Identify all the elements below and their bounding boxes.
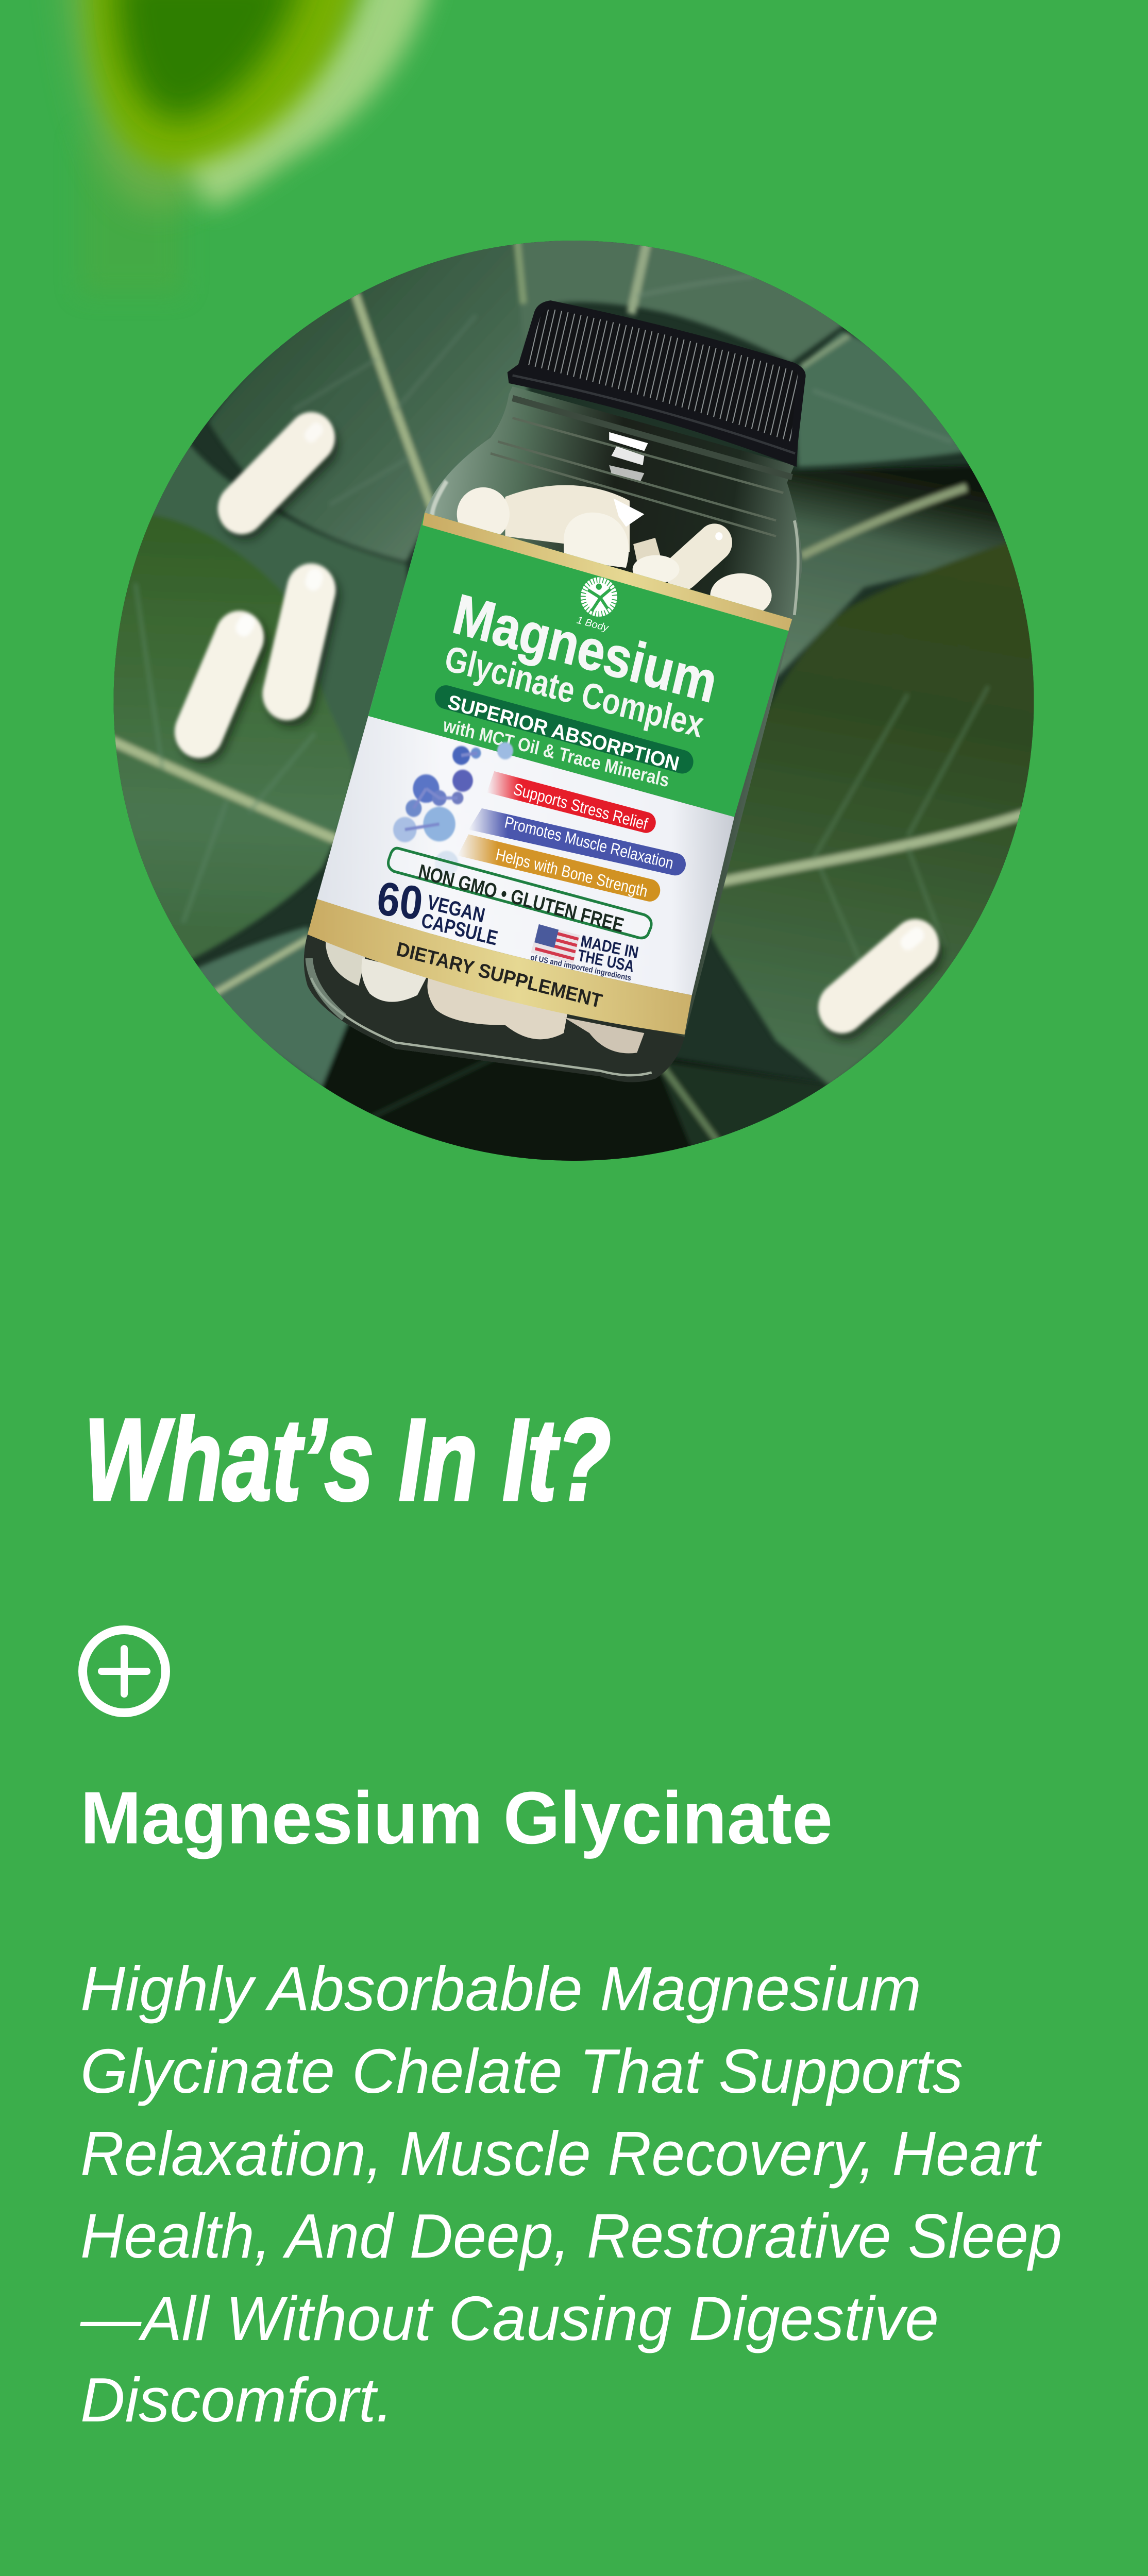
capsules inside jar, bottom	[326, 938, 644, 1053]
capsule count: CAPSULE	[419, 909, 500, 950]
dietary supplement: DIETARY SUPPLEMENT	[394, 938, 604, 1012]
leaf top centre	[518, 241, 843, 363]
made in usa badge: of US and imported ingredients	[530, 954, 632, 983]
mct line: with MCT Oil & Trace Minerals	[441, 714, 671, 791]
capsules inside jar, top	[457, 485, 772, 617]
backdrop	[113, 241, 1034, 1161]
label	[308, 513, 792, 1035]
molecules graphic	[393, 742, 513, 876]
red benefit bar: Supports Stress Relief	[512, 779, 650, 834]
jar glare	[609, 432, 648, 481]
non gmo box: NON GMO • GLUTEN FREE	[416, 860, 626, 937]
capsule count: 60	[375, 872, 426, 930]
ingredient description: Relaxation, Muscle Recovery, Heart	[80, 2119, 1042, 2189]
leaf upper left	[209, 213, 528, 562]
label green area	[368, 513, 792, 817]
big leaf right	[702, 540, 1058, 1087]
absorption pill: SUPERIOR ABSORPTION	[446, 690, 681, 776]
gold bands	[423, 513, 792, 631]
ingredient description: —All Without Causing Digestive	[80, 2283, 939, 2353]
leaf left	[80, 514, 353, 963]
leaf upper right	[795, 331, 981, 467]
soft leaf layer	[113, 241, 1034, 1161]
orange benefit bar: Helps with Bone Strength	[494, 845, 649, 901]
made in usa badge	[530, 924, 640, 983]
dark leaf behind left capsules	[152, 444, 409, 773]
leaf bottom left	[176, 926, 359, 1092]
leaf middle right	[776, 465, 1040, 678]
photo: bottle on leaves in circle	[113, 241, 1034, 1161]
ingredient description: Discomfort.	[80, 2365, 393, 2435]
blurred leaf top left	[62, 0, 402, 294]
capsule count: VEGAN	[425, 891, 487, 927]
product subtitle: Glycinate Complex	[441, 638, 707, 745]
title: What’s In It?	[84, 1394, 611, 1524]
made in usa badge: THE USA	[576, 946, 636, 976]
logo	[576, 581, 614, 634]
product name: Magnesium	[447, 582, 723, 715]
capsule shadows	[204, 446, 919, 1015]
capsule count	[375, 872, 500, 950]
ingredient description: Glycinate Chelate That Supports	[80, 2036, 963, 2106]
loose capsules	[199, 430, 917, 1008]
ingredient description	[80, 1954, 1062, 2435]
red benefit bar	[487, 771, 656, 834]
glass jar	[304, 386, 802, 1082]
bottle cap	[508, 300, 806, 467]
made in usa badge: MADE IN	[579, 931, 640, 962]
ingredient heading: Magnesium Glycinate	[80, 1776, 833, 1859]
orange benefit bar	[458, 834, 660, 902]
icon: plus in circle	[82, 1630, 166, 1713]
logo: 1 Body	[576, 615, 610, 634]
ingredient description: Health, And Deep, Restorative Sleep	[80, 2201, 1062, 2271]
label white area	[317, 716, 734, 995]
ingredient description: Highly Absorbable Magnesium	[80, 1954, 921, 2024]
blue benefit bar: Promotes Muscle Relaxation	[503, 812, 675, 873]
dark foliage at bottom	[315, 1013, 849, 1191]
